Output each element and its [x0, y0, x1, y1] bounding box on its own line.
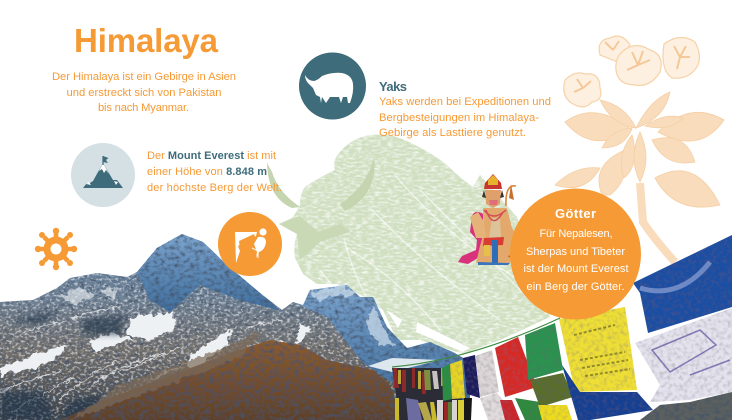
brown-grey transition slopes: [70, 330, 262, 420]
text: Yaks: Yaks werden bei Expeditionen und: [379, 96, 551, 108]
photo: prayer flags, small left group: [392, 368, 472, 420]
intro text: Der Himalaya ist ein Gebirge in Asien: [52, 71, 236, 83]
text: Yaks: Bergbesteigungen im Himalaya-: [379, 112, 539, 124]
intro text: bis nach Myanmar.: [98, 102, 189, 114]
snow streaks on lower slopes: [0, 308, 280, 412]
text: Yaks: [379, 79, 551, 139]
panel: Götter circle: Götter: [555, 206, 596, 221]
illustration: Hanuman figure: [458, 174, 525, 265]
icon: climber circle: [218, 212, 282, 276]
rope of prayer flags: [392, 318, 560, 367]
text: Mount Everest: der höchste Berg der Welt.: [147, 182, 282, 194]
text: Yaks: Gebirge als Lasttiere genutzt.: [379, 127, 526, 139]
far blue mountains: [293, 285, 470, 400]
fine snow speckle: [0, 234, 402, 420]
dark shadow hollows: [0, 310, 125, 420]
blue summit face: [137, 234, 281, 312]
brown foreground hill: [60, 340, 402, 420]
panel: Götter circle: [510, 188, 641, 320]
intro text: [52, 71, 236, 114]
panel: Götter circle: ist der Mount Everest: [524, 263, 628, 275]
illustration: green yak: [267, 135, 550, 354]
title: Himalaya: [74, 22, 219, 59]
icon: mountain summit circle: [71, 143, 135, 207]
text: Mount Everest: [147, 150, 282, 194]
text: Yaks: Yaks: [379, 79, 407, 94]
panel: Götter circle: Für Nepalesen,: [540, 228, 612, 240]
text: Mount Everest: Der Mount Everest ist mit: [147, 150, 276, 162]
panel: Götter circle: ein Berg der Götter.: [526, 281, 624, 293]
text: Mount Everest: einer Höhe von 8.848 m: [147, 166, 267, 178]
panel: Götter circle: Sherpas und Tibeter: [526, 246, 625, 258]
snow fields: [0, 288, 310, 375]
detail: flag prints: [574, 262, 730, 376]
icon: orange snowflake sun: [35, 228, 77, 270]
icon: yak circle: [299, 52, 366, 120]
illustration: rhododendron flower: [555, 36, 724, 262]
photo: prayer flags, large group: [442, 235, 732, 420]
bottom-right rocky strip: [640, 392, 732, 420]
main massif: [0, 234, 402, 420]
photo: mountain range: [0, 234, 732, 420]
intro text: und erstreckt sich von Pakistan: [66, 87, 222, 99]
